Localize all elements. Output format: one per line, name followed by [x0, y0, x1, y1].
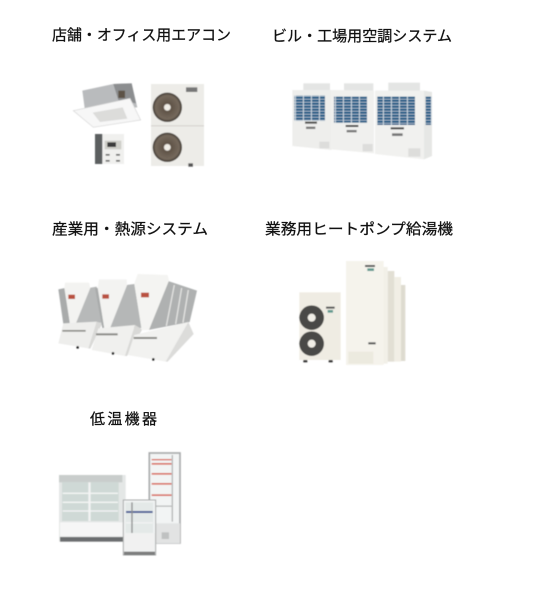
- icon: outdoor unit with two fans: [151, 84, 204, 167]
- icon: heat pump outdoor unit: [299, 292, 341, 362]
- icon: outdoor unit one: [292, 83, 332, 150]
- icon: multi-deck open showcase: [59, 475, 126, 542]
- icon: chiller unit one: [58, 283, 102, 349]
- icon: outdoor unit three: [375, 83, 432, 159]
- product image: store and office air conditioners: [73, 83, 204, 167]
- title: industrial and heat source systems: 産業用・熱源システム: [52, 221, 208, 238]
- icon: small glass showcase: [123, 500, 156, 555]
- icon: outdoor unit two: [332, 83, 374, 153]
- icon: hot water storage tanks: [346, 261, 405, 365]
- icon: remote controller: [95, 134, 124, 164]
- product image: refrigerated display cases: [59, 453, 180, 555]
- product image: industrial chiller units: [58, 274, 197, 362]
- icon: chiller unit three: [128, 274, 197, 362]
- title: commercial heat pump water heaters: 業務用ヒートポンプ給湯機: [265, 221, 453, 238]
- product image: building air conditioning outdoor units: [292, 83, 432, 159]
- icon: tall open display case: [149, 453, 180, 543]
- icon: ceiling cassette unit: [73, 83, 141, 127]
- title: store and office air conditioners: 店舗・オフィス用エアコン: [52, 27, 231, 44]
- title: refrigeration equipment: 低温機器: [90, 411, 157, 428]
- title: building and factory air conditioning systems: ビル・工場用空調システム: [272, 28, 452, 45]
- product image: heat pump water heater: [299, 261, 405, 365]
- icon: chiller unit two: [92, 279, 142, 356]
